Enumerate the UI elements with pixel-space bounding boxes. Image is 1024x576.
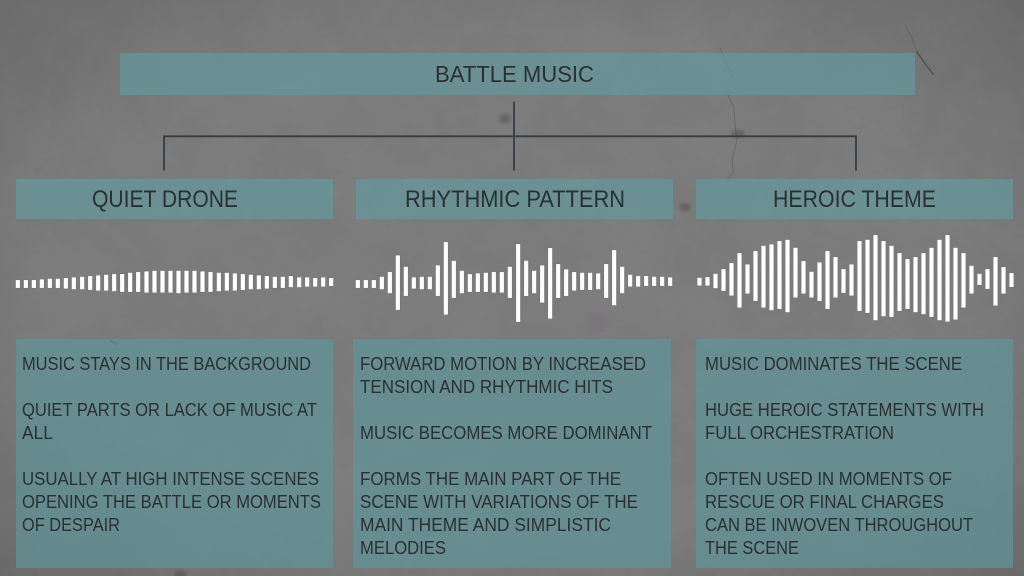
heading: rhythmic pattern: RHYTHMIC PATTERN	[405, 186, 625, 213]
heading: heroic theme	[696, 179, 1013, 219]
text panel: rhythmic pattern: SCENE WITH VARIATIONS OF THE	[360, 492, 638, 512]
text panel: heroic theme: THE SCENE	[705, 538, 799, 558]
text panel: quiet drone: USUALLY AT HIGH INTENSE SCENES	[22, 469, 319, 489]
waveform: rhythmic pattern	[356, 242, 672, 322]
text panel: heroic theme: OFTEN USED IN MOMENTS OF	[705, 469, 952, 489]
text panel: rhythmic pattern: FORWARD MOTION BY INCREASED	[360, 354, 646, 374]
waveform: heroic theme	[697, 235, 1014, 322]
text panel: quiet drone	[16, 339, 333, 568]
connector lines	[164, 102, 856, 170]
column: quiet drone	[16, 179, 333, 568]
waveform: quiet drone	[16, 271, 333, 293]
text panel: rhythmic pattern: TENSION AND RHYTHMIC HITS	[360, 377, 613, 397]
text panel: heroic theme: FULL ORCHESTRATION	[705, 423, 894, 443]
text panel: rhythmic pattern: MUSIC BECOMES MORE DOMINANT	[360, 423, 652, 443]
text panel: quiet drone: OPENING THE BATTLE OR MOMENTS	[22, 492, 321, 512]
text panel: quiet drone: OF DESPAIR	[22, 515, 120, 535]
heading: heroic theme: HEROIC THEME	[773, 186, 936, 213]
text panel: heroic theme: RESCUE OR FINAL CHARGES	[705, 492, 944, 512]
text panel: heroic theme: HUGE HEROIC STATEMENTS WITH	[705, 400, 984, 420]
text panel: rhythmic pattern: MELODIES	[360, 538, 446, 558]
heading: rhythmic pattern	[356, 179, 673, 219]
text panel: rhythmic pattern	[353, 339, 671, 568]
text panel: heroic theme	[696, 339, 1013, 568]
title bar	[120, 53, 915, 95]
text panel: heroic theme: CAN BE INWOVEN THROUGHOUT	[705, 515, 973, 535]
text panel: rhythmic pattern: FORMS THE MAIN PART OF THE	[360, 469, 621, 489]
heading: quiet drone	[16, 179, 333, 219]
heading: quiet drone: QUIET DRONE	[92, 186, 238, 213]
title bar: BATTLE MUSIC	[435, 61, 594, 87]
text panel: rhythmic pattern: MAIN THEME AND SIMPLISTIC	[360, 515, 611, 535]
text panel: heroic theme: MUSIC DOMINATES THE SCENE	[705, 354, 962, 374]
text panel: quiet drone: MUSIC STAYS IN THE BACKGROUND	[22, 354, 311, 374]
text panel: quiet drone: ALL	[22, 423, 53, 443]
text panel: quiet drone: QUIET PARTS OR LACK OF MUSIC AT	[22, 400, 317, 420]
column: rhythmic pattern	[353, 179, 673, 568]
column: heroic theme	[696, 179, 1014, 568]
